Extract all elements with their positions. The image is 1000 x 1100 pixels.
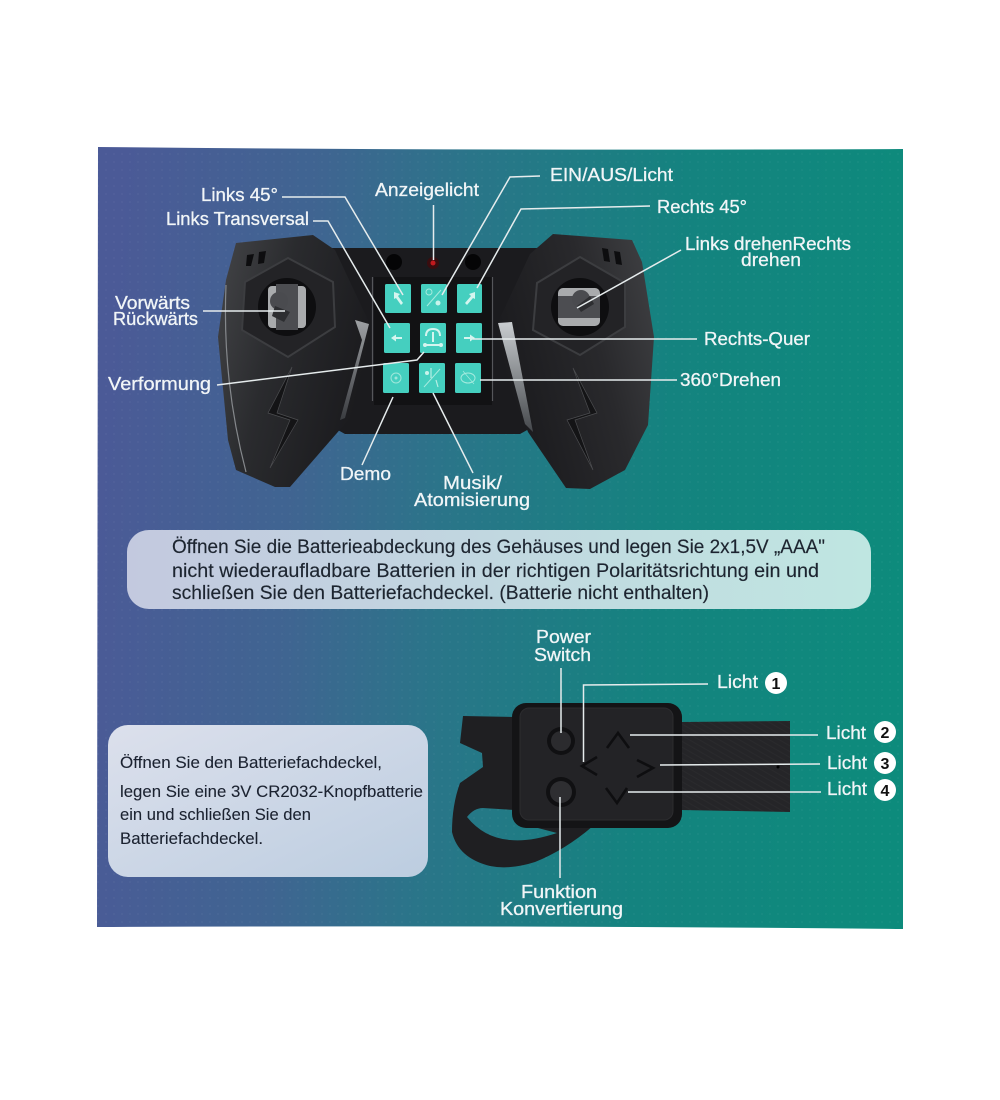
right joystick (533, 257, 625, 355)
label: Links drehen Rechts drehen: Links drehenRechts (685, 233, 851, 254)
keypad frame (372, 277, 492, 405)
label: Licht 2 (826, 721, 896, 743)
label: 360 Drehen: 360°Drehen (680, 369, 781, 390)
label: Links 45: Links 45° (201, 184, 278, 205)
key: left 45 (385, 284, 411, 313)
controller labels (108, 164, 851, 510)
right grip (495, 234, 654, 489)
keypad buttons (383, 284, 482, 393)
callout: AAA battery instructions (127, 530, 871, 609)
vents (246, 248, 622, 266)
label: Funktion Konvertierung: Funktion (521, 881, 597, 902)
key: 360 (455, 363, 481, 393)
label: Musik Atomisierung: Atomisierung (414, 489, 530, 510)
label: Links Transversal: Links Transversal (166, 208, 309, 229)
label: Licht 4: 4 (881, 783, 890, 800)
label: Licht 2: 2 (881, 725, 890, 742)
label: Musik Atomisierung: Musik/ (443, 472, 503, 493)
power button (547, 727, 575, 755)
background panel (97, 147, 903, 929)
left lightning (268, 367, 298, 468)
label: Licht 3: 3 (881, 756, 890, 773)
label: Rechts-Quer: Rechts-Quer (704, 328, 810, 349)
label: Verformung: Verformung (108, 373, 211, 394)
label: Vorwaerts Rueckwaerts: Vorwärts (115, 292, 190, 313)
controller centre body (320, 248, 545, 434)
remote labels (500, 626, 896, 919)
key: power and light (421, 284, 447, 313)
callout: CR2032 battery instructions: Batteriefachdeckel. (120, 830, 263, 848)
remote body (512, 703, 682, 828)
label: Funktion Konvertierung: Konvertierung (500, 898, 623, 919)
label: Musik Atomisierung (414, 472, 530, 510)
callout: CR2032 battery instructions: legen Sie eine 3V CR2032-Knopfbatterie (120, 783, 423, 801)
label: Links drehen Rechts drehen (685, 233, 851, 270)
label: Power Switch: Power (536, 626, 591, 647)
label: Licht 4 (827, 778, 896, 801)
key: music and atomisation (419, 363, 445, 393)
key: right (456, 323, 482, 353)
silver highlights (225, 285, 533, 472)
strap hole (776, 766, 780, 768)
label: Anzeigelicht: Anzeigelicht (375, 179, 479, 200)
label: Licht 1: Licht (717, 671, 758, 692)
wrist remote photo (452, 703, 790, 867)
label: Power Switch: Switch (534, 644, 591, 665)
function button (546, 777, 576, 807)
left strap and loop (452, 716, 593, 867)
label: Licht 3: Licht (827, 752, 867, 773)
remote leader lines (560, 668, 821, 878)
key: left (384, 323, 410, 353)
right strap (680, 721, 790, 812)
key: transform (420, 323, 446, 353)
callout: AAA battery instructions: nicht wiederaufladbare Batterien in der richtigen Polaritätsrichtung ein und (172, 561, 819, 582)
label: Licht 1 (717, 671, 787, 694)
label: Vorwaerts Rueckwaerts: Rückwärts (113, 308, 198, 329)
label: Demo: Demo (340, 463, 391, 484)
controller photo (218, 234, 654, 489)
indicator light and screws (386, 254, 481, 270)
label: Rechts 45: Rechts 45° (657, 196, 747, 217)
direction arrows (582, 733, 653, 803)
right lightning (567, 368, 597, 470)
callout: AAA battery instructions: schließen Sie den Batteriefachdeckel. (Batterie nicht enthalten) (172, 583, 709, 604)
label: Licht 1: 1 (772, 676, 781, 693)
left joystick (242, 258, 335, 357)
label: Licht 2: Licht (826, 722, 866, 743)
label: Licht 3 (827, 752, 896, 774)
callout: CR2032 battery instructions (108, 725, 428, 877)
label: EIN/AUS/Licht: EIN/AUS/Licht (550, 164, 673, 185)
left grip (218, 235, 372, 487)
label: Links drehen Rechts drehen: drehen (741, 249, 801, 270)
key: demo (383, 363, 409, 393)
key: right 45 (457, 284, 482, 313)
label: Licht 4: Licht (827, 778, 867, 799)
callout: CR2032 battery instructions: Öffnen Sie den Batteriefachdeckel, (120, 754, 382, 772)
label: Vorwaerts Rueckwaerts (113, 292, 198, 329)
controller leader lines (203, 176, 697, 473)
callout: CR2032 battery instructions: ein und schließen Sie den (120, 806, 311, 824)
label: Funktion Konvertierung (500, 881, 623, 919)
label: Power Switch (534, 626, 591, 665)
callout: AAA battery instructions: Öffnen Sie die Batterieabdeckung des Gehäuses und legen Sie 2x1,5V „AAA" (172, 537, 825, 558)
